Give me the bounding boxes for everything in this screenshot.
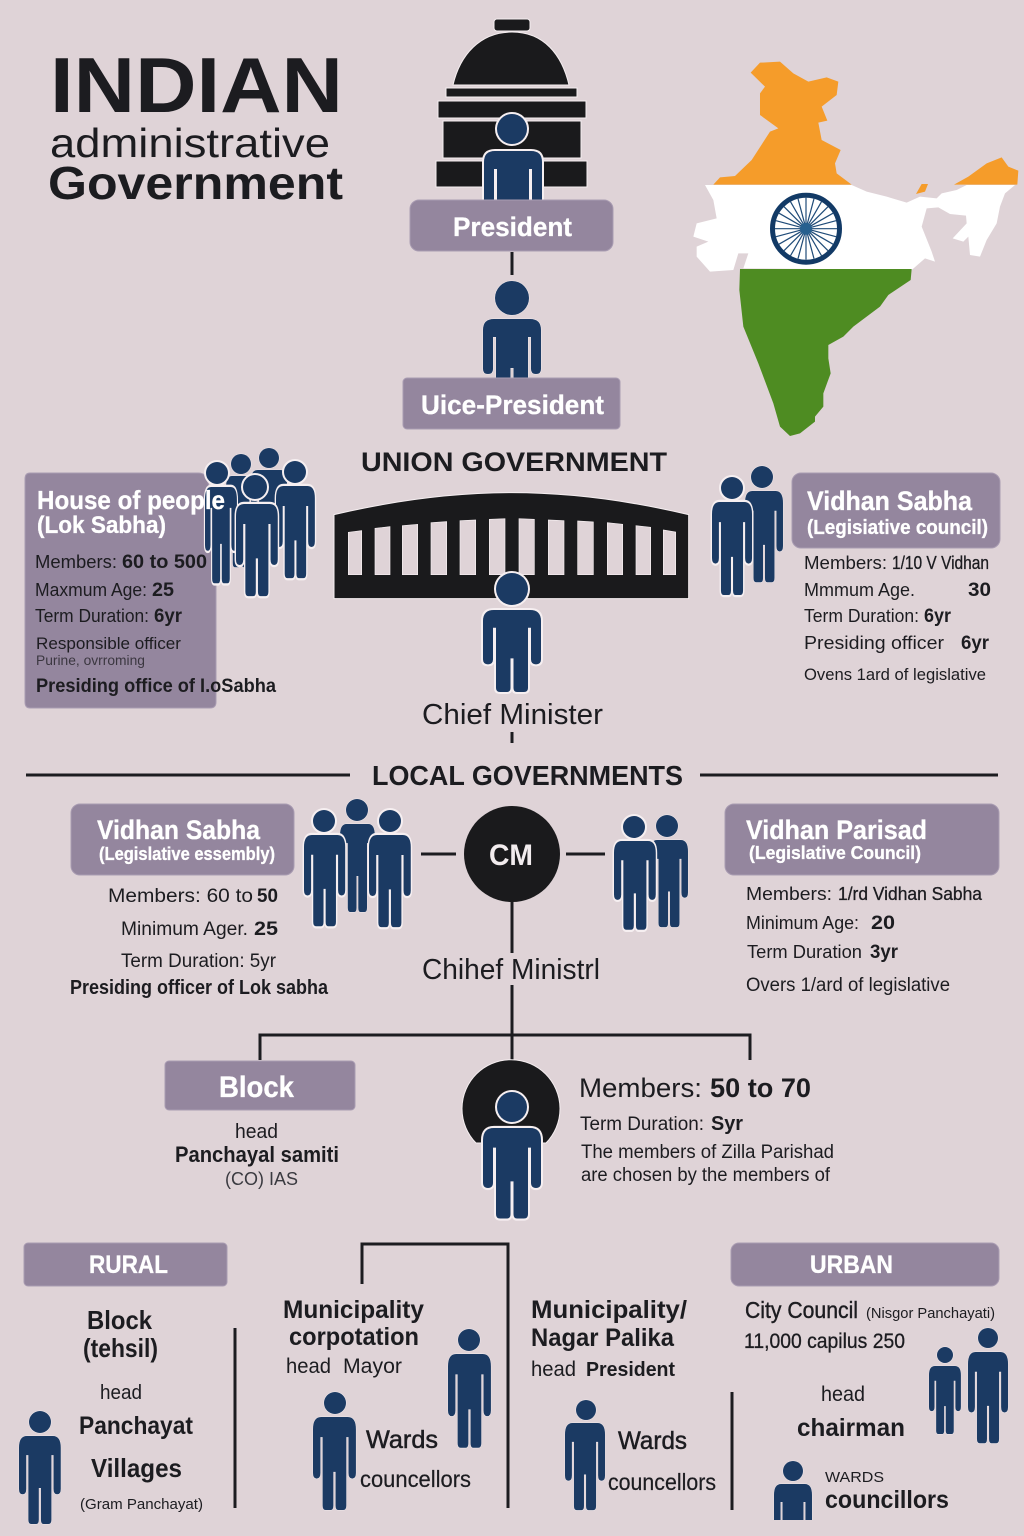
panel: Vidhan Sabha legislative assembly: Vidhan Sabha (97, 815, 261, 845)
panel: Rural header: RURAL (89, 1251, 168, 1279)
text: municipal corporation (283, 1296, 471, 1492)
panel: Vidhan Parisad: Term Duration (747, 942, 862, 962)
label: Vice-President (403, 378, 620, 429)
text: rural block: (tehsil) (83, 1333, 158, 1363)
panel: Vidhan Parisad: 3yr (870, 942, 899, 963)
panel text: Lok Sabha: 60 to 500 (122, 552, 207, 573)
panel: Vidhan Parisad: Vidhan Parisad (746, 815, 927, 845)
dividers and connector (235, 1244, 732, 1510)
panel: Vidhan Sabha legislative council (792, 473, 1000, 684)
map of India in tricolour (693, 62, 1018, 436)
panel text: Lok Sabha: Maxmum Age: (35, 580, 147, 600)
panel: Vidhan Sabha legislative assembly: Minimum Ager. (121, 919, 248, 940)
panel: Vidhan Sabha legislative assembly: 50 (257, 886, 278, 907)
text: municipal corporation: head (286, 1355, 331, 1378)
text: municipal corporation: councellors (360, 1466, 471, 1492)
panel: Vidhan Sabha legislative assembly: 25 (254, 919, 278, 940)
panel: Vidhan Sabha legislative assembly: (Legislative essembly) (99, 844, 275, 864)
icon: ward person (774, 1460, 812, 1520)
panel text: Lok Sabha: Members: (35, 552, 117, 572)
panel text: Lok Sabha: Presiding office of I.oSabha (36, 676, 276, 697)
panel: Lok Sabha background (25, 473, 216, 708)
icon: CM circle (464, 806, 560, 902)
connector: president to vice-president (510, 252, 514, 275)
panel: Vidhan Parisad (725, 804, 999, 996)
label: President (410, 200, 613, 251)
panel text: Lok Sabha: Responsible officer (36, 634, 181, 653)
text: members of zilla parishad: are chosen by the members of (581, 1165, 831, 1186)
panel: Rural header (24, 1243, 227, 1286)
title: Government (48, 157, 343, 209)
text: municipal corporation: Municipality (283, 1296, 424, 1324)
icon: president figure (484, 114, 542, 234)
text: rural block: head (100, 1382, 142, 1404)
heading: Local Governments: LOCAL GOVERNMENTS (372, 760, 683, 791)
panel: Vidhan Sabha legislative assembly (70, 804, 329, 999)
text: rural block: Block (87, 1305, 152, 1335)
icon: nagar palika person (565, 1400, 605, 1510)
text: members of zilla parishad: Term Duration: (580, 1114, 704, 1135)
icon: municipal corporation people (313, 1329, 491, 1510)
panel: Urban header (731, 1243, 999, 1286)
text: municipality nagar palika: councellors (608, 1469, 716, 1495)
panel: Vidhan Sabha legislative council: Term Duration: (804, 606, 919, 626)
panel: Vidhan Sabha legislative council: 30 (968, 580, 991, 601)
icon: two people, legislative council local (614, 815, 688, 930)
text: members of zilla parishad: Members: (579, 1073, 702, 1103)
panel: Vidhan Parisad: 20 (871, 913, 895, 934)
panel: Block: Block (219, 1071, 294, 1104)
icon: Ashoka chakra wheel (772, 195, 840, 262)
text: municipal corporation: Mayor (343, 1355, 402, 1378)
panel: Vidhan Parisad: (Legislative Council) (749, 843, 921, 863)
text: municipality nagar palika: Wards (618, 1427, 687, 1455)
label: President: President (453, 212, 572, 242)
text: rural block: Panchayat (79, 1412, 194, 1440)
panel: Vidhan Parisad: Members: (746, 884, 832, 904)
panel text: Lok Sabha: Purine, ovrroming (36, 652, 145, 668)
text: city council (744, 1297, 995, 1514)
panel: Vidhan Sabha legislative council: 6yr (924, 606, 952, 627)
text: municipality nagar palika: head (531, 1358, 576, 1381)
panel: Vidhan Sabha legislative council: Vidhan Sabha (807, 486, 973, 516)
title (48, 41, 343, 209)
text: municipal corporation: corpotation (289, 1323, 419, 1351)
text: municipality nagar palika (531, 1296, 716, 1495)
text: city council: City Council (745, 1297, 858, 1323)
icon: parliament building (334, 493, 689, 599)
panel: Block: (CO) IAS (225, 1169, 298, 1189)
panel: Vidhan Sabha legislative council: Ovens 1ard of legislative (804, 665, 986, 684)
panel text: Lok Sabha: 25 (152, 580, 174, 601)
label: Vice-President: Uice-President (421, 390, 604, 420)
panel: Vidhan Sabha legislative assembly: Members: 60 to (108, 886, 253, 907)
text: members of zilla parishad: Syr (711, 1113, 743, 1135)
label: Chief Minister (local): Chihef Ministrl (422, 954, 600, 986)
panel text: Lok Sabha: (Lok Sabha) (37, 512, 166, 539)
icon: city council people (929, 1328, 1008, 1443)
panel text: Lok Sabha: House of people (37, 485, 225, 515)
label: Chief Minister: Chief Minister (422, 699, 603, 731)
panel: Vidhan Parisad: Overs 1/ard of legislative (746, 975, 950, 996)
icon: vice-president figure (483, 281, 541, 402)
connector tree (260, 985, 750, 1066)
title: INDIAN (50, 41, 343, 129)
panel: Vidhan Parisad: Minimum Age: (746, 913, 859, 933)
connectors around CM circle (421, 854, 605, 953)
panel: Vidhan Sabha legislative council: 6yr (961, 633, 990, 654)
panel: Vidhan Sabha legislative council: Presiding officer (804, 633, 944, 653)
text: city council: councillors (825, 1486, 949, 1514)
title: administrative (50, 120, 330, 166)
icon: two people, legislative council (712, 466, 783, 595)
text: members of zilla parishad: 50 to 70 (710, 1073, 811, 1103)
panel: Block: head (235, 1121, 278, 1143)
icon: three people (304, 799, 411, 927)
icon: group of people (205, 448, 315, 596)
panel: Vidhan Sabha legislative council: 1/10 V Vidhan (892, 553, 989, 573)
panel text: Lok Sabha: Term Duration: (35, 606, 149, 626)
panel: Vidhan Sabha legislative council: Members: (804, 553, 887, 573)
text: municipality nagar palika: Municipality/ (531, 1296, 687, 1324)
icon: CM circle: CM (489, 839, 533, 872)
panel: Vidhan Sabha legislative assembly: Term Duration: 5yr (121, 951, 277, 972)
text: municipal corporation: Wards (366, 1426, 438, 1454)
panel: Block: Panchayal samiti (175, 1142, 339, 1167)
panel: Vidhan Sabha legislative council: (Legisiative council) (807, 517, 988, 539)
text: rural block (79, 1305, 203, 1513)
connector tick (510, 732, 514, 743)
text: members of zilla parishad (579, 1073, 834, 1186)
text: members of zilla parishad: The members of Zilla Parishad (581, 1142, 834, 1163)
icon: chief minister figure (483, 573, 541, 692)
panel text: Lok Sabha (35, 485, 276, 697)
text: city council: WARDS (825, 1469, 884, 1486)
icon: zilla parishad figure on dark circle (462, 1060, 560, 1218)
text: municipality nagar palika: President (586, 1359, 675, 1381)
text: city council: chairman (797, 1414, 905, 1442)
text: rural block: (Gram Panchayat) (80, 1496, 203, 1513)
text: city council: (Nisgor Panchayati) (866, 1305, 995, 1322)
text: municipality nagar palika: Nagar Palika (531, 1324, 675, 1352)
icon: domed building (436, 19, 587, 187)
text: city council: head (821, 1383, 865, 1406)
panel: Vidhan Sabha legislative assembly: Presiding officer of Lok sabha (70, 977, 329, 999)
panel: Urban header: URBAN (810, 1251, 893, 1279)
panel: Vidhan Sabha legislative council: Mmmum Age. (804, 580, 915, 600)
icon: rural person (19, 1411, 61, 1524)
text: rural block: Villages (91, 1453, 182, 1483)
text: city council: 11,000 capilus 250 (744, 1330, 905, 1353)
heading: Union Government: UNION GOVERNMENT (361, 447, 668, 477)
panel: Block (165, 1061, 355, 1189)
panel: Vidhan Parisad: 1/rd Vidhan Sabha (838, 884, 983, 904)
panel text: Lok Sabha: 6yr (154, 606, 183, 627)
